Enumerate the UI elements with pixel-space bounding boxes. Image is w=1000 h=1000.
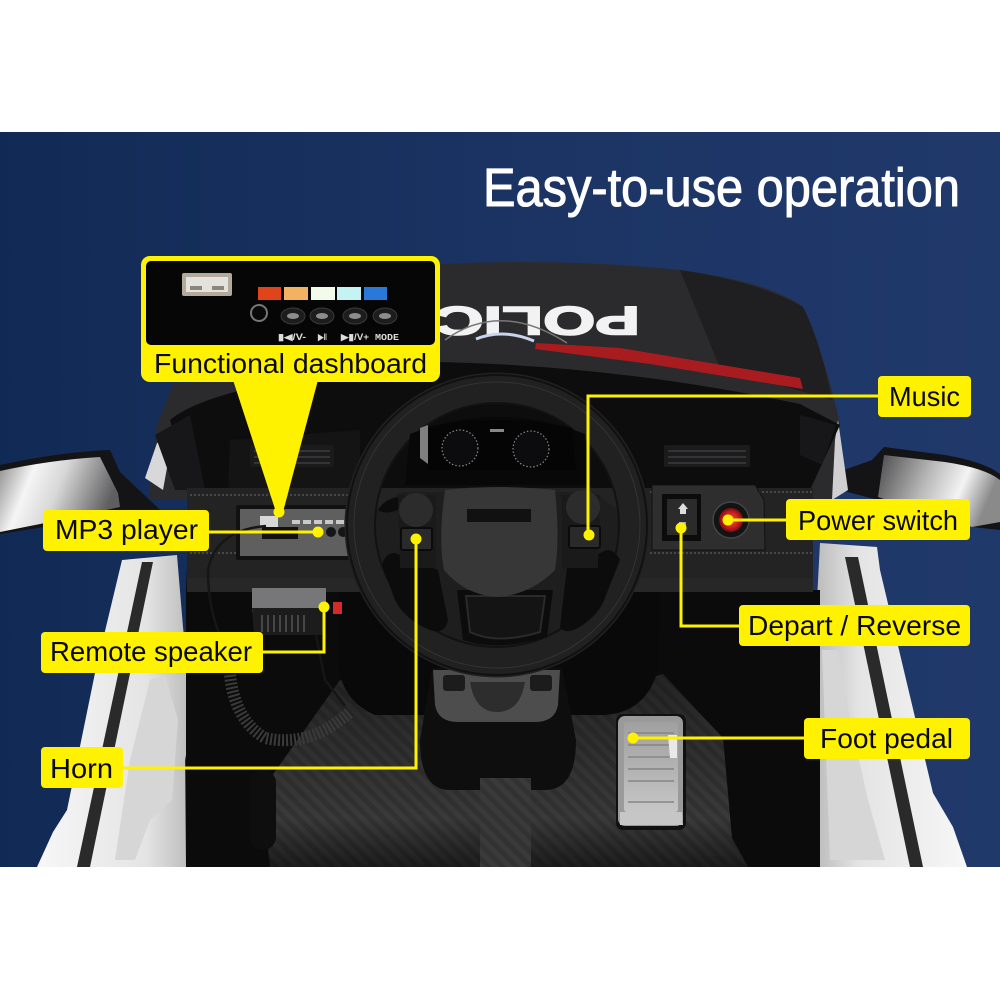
steering wheel <box>347 375 647 675</box>
right thumb control <box>562 490 600 568</box>
USB port <box>182 273 232 296</box>
button labels: MODE <box>375 333 400 343</box>
car: side mirrors <box>0 447 1000 535</box>
spoke cut-outs <box>378 497 620 645</box>
car: right door <box>813 420 967 867</box>
LED indicators <box>258 287 387 300</box>
centre console <box>420 668 576 790</box>
MP3 panel <box>236 505 351 560</box>
knee blocks <box>338 590 660 715</box>
label: Foot pedal: Foot pedal <box>820 723 953 754</box>
label: Remote speaker: Remote speaker <box>50 636 252 667</box>
label: MP3 player <box>43 510 324 551</box>
depart/reverse switch <box>662 494 701 541</box>
carbon floor <box>262 674 748 867</box>
label: MP3 player: MP3 player <box>55 514 198 545</box>
remote speaker and cable <box>208 526 350 740</box>
callout: functional dashboard <box>141 256 440 518</box>
police lettering: POLIC <box>435 298 640 342</box>
left air vent <box>250 445 334 467</box>
car: dashboard <box>155 362 840 592</box>
control buttons <box>281 308 397 324</box>
label: Depart / Reverse <box>676 522 970 646</box>
car: roof <box>150 262 840 500</box>
label: Foot pedal <box>628 718 970 759</box>
switch panel <box>652 485 765 550</box>
navy background panel <box>0 132 1000 867</box>
instrument cluster <box>405 417 590 485</box>
button labels <box>278 332 400 343</box>
car: left door <box>37 440 193 867</box>
centre floor strip <box>480 778 531 867</box>
label: Remote speaker <box>41 602 330 673</box>
foot pedal <box>616 714 686 830</box>
label: Horn: Horn <box>50 753 113 784</box>
button highlights <box>287 313 391 319</box>
title: Easy-to-use operation <box>483 158 960 218</box>
callout heading: Functional dashboard <box>154 348 427 379</box>
label: Music: Music <box>889 381 960 412</box>
label: Power switch: Power switch <box>798 505 958 536</box>
label: Depart / Reverse: Depart / Reverse <box>748 610 961 641</box>
police badge arc <box>445 321 567 343</box>
wheel hub <box>441 487 558 597</box>
button labels: ▮◀/V- <box>278 332 306 342</box>
right air vent <box>664 445 750 467</box>
button labels: ▶▮/V+ <box>340 332 369 342</box>
red stripe <box>535 343 803 389</box>
car: interior cabin <box>186 590 820 867</box>
label: Music <box>584 376 971 540</box>
audio jack <box>251 305 267 321</box>
label: Power switch <box>722 499 970 540</box>
power button <box>713 502 749 538</box>
button labels: ▶‖ <box>317 332 327 342</box>
label: Horn <box>41 534 422 788</box>
wheel centre lower area <box>368 492 626 670</box>
left thumb control <box>398 493 436 568</box>
